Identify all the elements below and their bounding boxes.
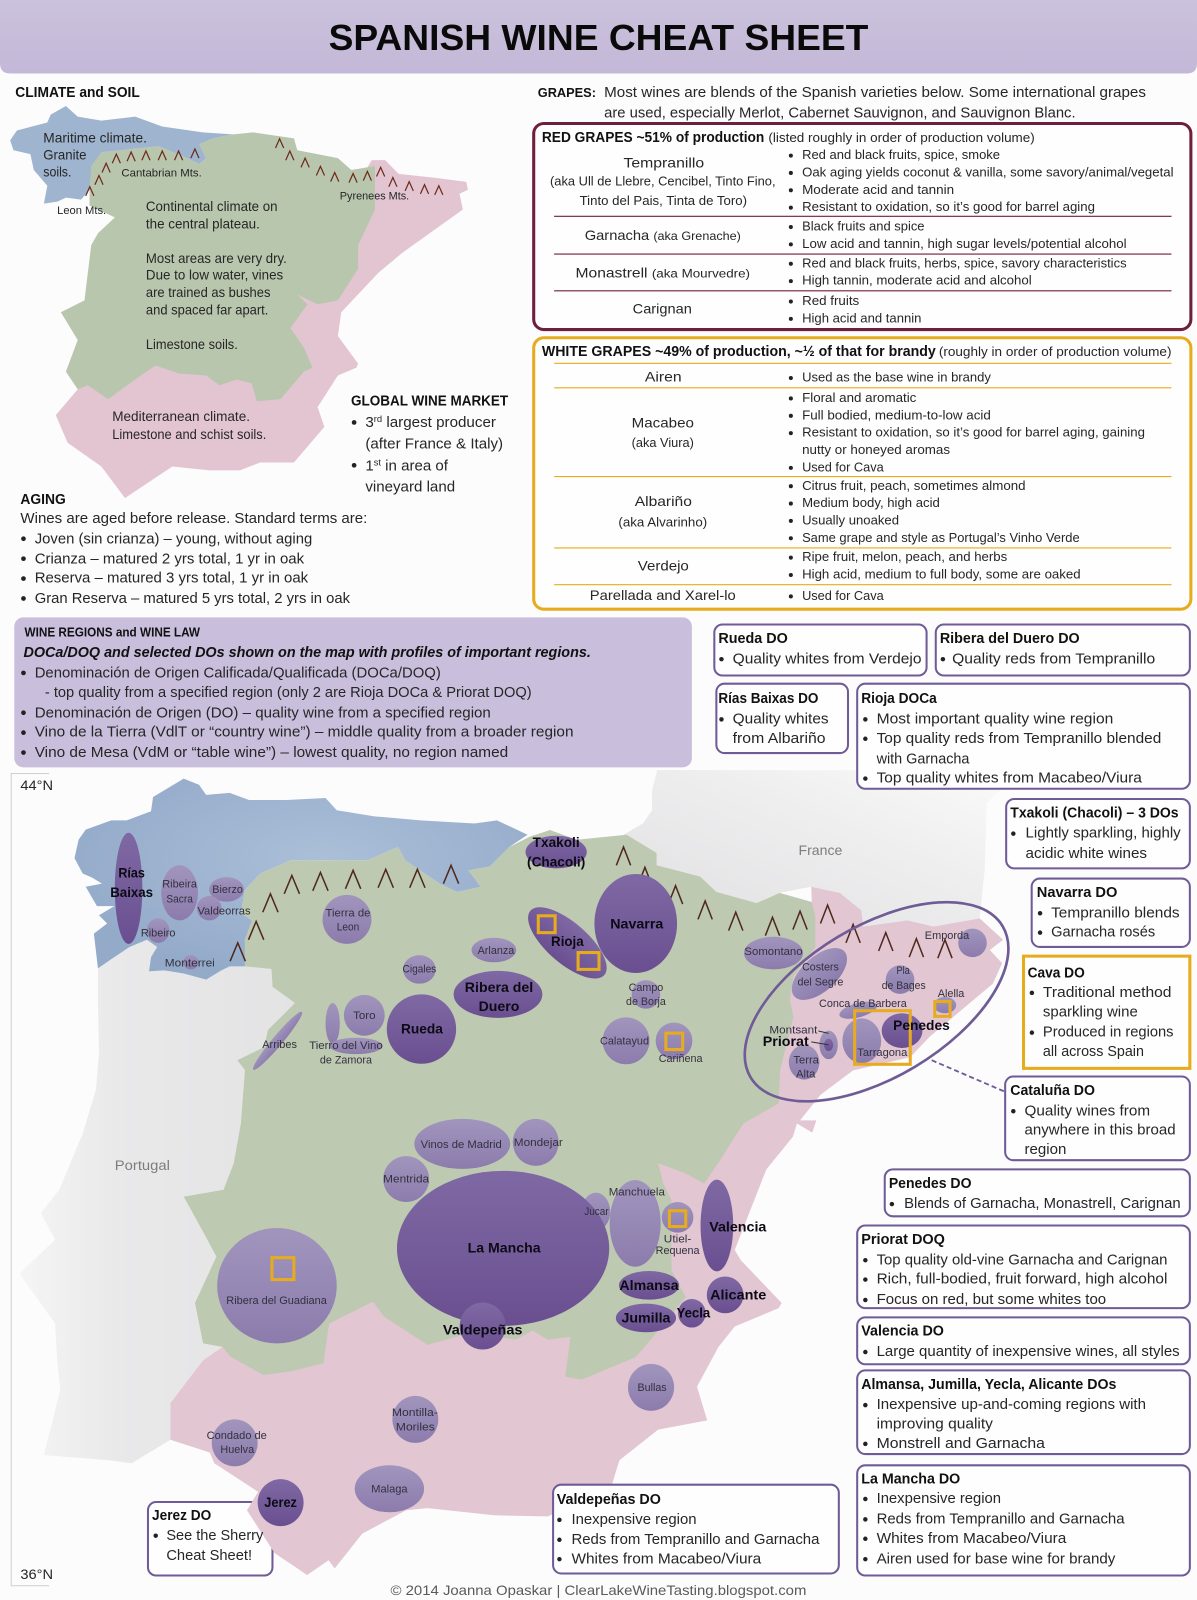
callout: Navarra DO: Tempranillo blends	[1051, 905, 1180, 921]
callout: Priorat DOQ: Focus on red, but some whites too	[877, 1292, 1106, 1308]
region labels: major: Valdepeñas	[443, 1322, 523, 1338]
callout text: Jerez DO	[152, 1508, 264, 1564]
latitude labels	[20, 778, 53, 1583]
climate text: maritime: Maritime climate.	[43, 130, 147, 146]
region labels: minor: Mondejar	[514, 1137, 563, 1149]
grapes intro text: Most wines are blends of the Spanish varieties below. Some international grapes	[604, 85, 1146, 101]
region labels: major: Jerez	[264, 1494, 297, 1510]
callout: Rías Baixas DO: Rías Baixas DO	[718, 691, 818, 707]
climate text: maritime	[43, 130, 147, 181]
grape: macabeo	[632, 391, 1145, 474]
callout: Txakoli: acidic white wines	[1026, 846, 1147, 862]
climate text: mediterranean: Mediterranean climate.	[112, 409, 250, 425]
grapes intro text	[538, 85, 1146, 121]
region labels: major: Txakoli	[533, 834, 580, 850]
callout: Valencia DO: Large quantity of inexpensive wines, all styles	[877, 1344, 1180, 1360]
panel: global wine market	[351, 394, 508, 495]
region labels: major: Valencia	[709, 1219, 767, 1235]
callout: Rueda DO: Quality whites from Verdejo	[733, 651, 921, 667]
callout text: Jerez DO: Cheat Sheet!	[166, 1548, 252, 1564]
region labels: minor: Tierro del Vino	[309, 1040, 383, 1052]
grape: tempranillo: Tinto del Pais, Tinta de Toro)	[580, 194, 747, 208]
grape: carignan: Red fruits	[802, 294, 859, 308]
grape: macabeo: Macabeo	[632, 416, 694, 432]
panel: white grapes: (roughly in order of production volume)	[939, 345, 1171, 359]
callout: Priorat DOQ: Priorat DOQ	[861, 1232, 945, 1248]
callout: Valdepeñas DO: Reds from Tempranillo and Garnacha	[571, 1532, 820, 1548]
callout: Rioja DOCa: Top quality whites from Macabeo/Viura	[877, 771, 1143, 787]
panel: wine regions and wine law: Vino de Mesa (VdM or “table wine”) – lowest quality, no region named	[35, 745, 508, 761]
panel: wine regions and wine law: Denominación de Origen Calificada/Qualificada (DOCa/DOQ)	[35, 666, 441, 682]
region labels: minor: Cariñena	[659, 1053, 703, 1065]
callout: Rioja DOCa	[857, 684, 1190, 789]
panel: aging	[20, 492, 367, 607]
Catalonia dashed leader	[932, 1060, 1005, 1092]
grape: verdejo: Ripe fruit, melon, peach, and herbs	[802, 550, 1007, 564]
region labels: minor: Bullas	[638, 1382, 667, 1394]
Catalonia outline	[712, 861, 1041, 1142]
grape: albarino	[618, 479, 1080, 545]
region labels: major: La Mancha	[468, 1240, 541, 1256]
grape: monastrell: Monastrell (aka Mourvedre)	[576, 266, 750, 282]
grape: airen: Used as the base wine in brandy	[802, 371, 992, 385]
grapes intro text: GRAPES:	[538, 85, 596, 100]
climate text: continental: Due to low water, vines	[146, 268, 283, 284]
region labels: major: Navarra	[610, 916, 664, 932]
region labels: major: Penedes	[893, 1017, 950, 1033]
callout: La Mancha DO: La Mancha DO	[861, 1472, 960, 1488]
climate text: continental: Continental climate on	[146, 199, 278, 215]
country labels	[115, 843, 842, 1174]
map frame corner lines	[11, 773, 49, 1586]
region labels: major: Ribera del	[465, 979, 533, 995]
region labels: minor: de Zamora	[320, 1054, 372, 1066]
grape: monastrell: Red and black fruits, herbs, spice, savory characteristics	[802, 256, 1127, 270]
footer credit: © 2014 Joanna Opaskar | ClearLakeWineTasting.blogspot.com	[391, 1583, 806, 1599]
callout: Rueda DO: Rueda DO	[718, 631, 788, 647]
heading: climate and soil: CLIMATE and SOIL	[15, 85, 140, 101]
climate text: maritime: Granite	[43, 148, 87, 164]
grape: monastrell: High tannin, moderate acid and alcohol	[802, 274, 1032, 288]
panel: aging: Joven (sin crianza) – young, without aging	[35, 532, 312, 548]
climate text: maritime: soils.	[43, 165, 71, 181]
callout: La Mancha DO: Airen used for base wine for brandy	[877, 1551, 1116, 1567]
callout: Navarra DO	[1032, 879, 1190, 947]
region labels: major: Baixas	[110, 884, 153, 900]
callout: Rías Baixas DO: Quality whites	[733, 711, 829, 727]
callout: Rueda DO	[714, 624, 927, 676]
callout: Navarra DO: Garnacha rosés	[1051, 925, 1155, 941]
grape: verdejo: Verdejo	[638, 558, 689, 574]
grape: albarino: (aka Alvarinho)	[618, 516, 707, 530]
panel: wine regions and wine law: Vino de la Tierra (VdlT or “country wine”) – middle quality from a broader region	[35, 725, 573, 741]
callout: Rías Baixas DO: from Albariño	[733, 731, 826, 747]
region labels: minor: Arlanza	[478, 945, 514, 957]
region labels: minor	[141, 879, 969, 1495]
callout: Cava DO: sparkling wine	[1043, 1004, 1138, 1020]
callout: Rías Baixas DO	[716, 684, 848, 753]
grape: albarino: Same grape and style as Portugal’s Vinho Verde	[802, 531, 1080, 545]
callout: Rioja DOCa: Most important quality wine region	[877, 711, 1113, 727]
region labels: minor: de Borja	[626, 996, 666, 1008]
region labels: major: Rías	[118, 865, 145, 881]
grape: tempranillo: (aka Ull de Llebre, Cencibel, Tinto Fino,	[550, 175, 776, 189]
panel: global wine market: 3	[365, 415, 374, 431]
grape: garnacha: Garnacha (aka Grenache)	[585, 228, 741, 244]
grapes intro text: are used, especially Merlot, Cabernet Sauvignon, and Sauvignon Blanc.	[604, 105, 1076, 121]
region labels: minor: Ribeiro	[141, 928, 176, 940]
panel: wine regions and wine law: WINE REGIONS and WINE LAW	[24, 625, 200, 640]
region labels: minor: Leon	[337, 922, 359, 934]
climate text: continental	[146, 199, 287, 353]
grape: parellada and xarel-lo	[590, 588, 884, 604]
title banner: SPANISH WINE CHEAT SHEET	[329, 18, 869, 58]
panel: global wine market: GLOBAL WINE MARKET	[351, 394, 508, 410]
region labels: minor: Costers	[802, 961, 839, 973]
callout: La Mancha DO: Whites from Macabeo/Viura	[877, 1531, 1067, 1547]
callout: Valdepeñas DO: Whites from Macabeo/Viura	[571, 1551, 762, 1567]
mountain labels	[57, 168, 409, 217]
callout: Priorat DOQ	[857, 1226, 1190, 1308]
region labels: minor: Malaga	[371, 1483, 408, 1495]
grape: macabeo: Full bodied, medium-to-low acid	[802, 408, 991, 422]
panel: global wine market: vineyard land	[365, 479, 455, 495]
region labels: minor: Tarragona	[857, 1047, 907, 1059]
country labels: France	[799, 843, 842, 859]
grape: albarino: Medium body, high acid	[802, 496, 940, 510]
panel: global wine market: st	[374, 457, 381, 467]
grape: carignan: Carignan	[633, 301, 692, 317]
grape: parellada and xarel-lo: Parellada and Xarel-lo	[590, 588, 736, 604]
grape: garnacha: Low acid and tannin, high sugar levels/potential alcohol	[802, 237, 1127, 251]
climate zone: Mediterranean	[170, 887, 1003, 1575]
grape: carignan: High acid and tannin	[802, 311, 922, 325]
title banner	[0, 0, 1197, 73]
callout: Cataluña DO: Quality wines from	[1025, 1103, 1150, 1119]
callout: Cataluña DO: Cataluña DO	[1010, 1083, 1095, 1099]
callout: Ribera del Duero DO: Quality reds from Tempranillo	[952, 651, 1155, 667]
grape: macabeo: Used for Cava	[802, 460, 884, 474]
callout: Penedes DO: Penedes DO	[889, 1176, 971, 1192]
mountain labels: Leon Mts.	[57, 205, 106, 217]
callout: Txakoli	[1006, 799, 1190, 868]
region labels: minor: Valdeorras	[197, 905, 251, 917]
callout: Priorat DOQ: Rich, full-bodied, fruit forward, high alcohol	[877, 1272, 1167, 1288]
callout: La Mancha DO: Inexpensive region	[877, 1491, 1001, 1507]
region labels: minor: Alella	[938, 988, 964, 1000]
grape: garnacha: Black fruits and spice	[802, 220, 925, 234]
panel: wine regions and wine law	[14, 617, 692, 767]
callout: Txakoli: Txakoli (Chacoli) – 3 DOs	[1010, 805, 1179, 821]
callout: Priorat DOQ: Top quality old-vine Garnacha and Carignan	[877, 1252, 1167, 1268]
panel: aging: Wines are aged before release. Standard terms are:	[20, 511, 367, 527]
callout: Ribera del Duero DO: Ribera del Duero DO	[940, 631, 1080, 647]
grape: macabeo: Floral and aromatic	[802, 391, 916, 405]
callout: Txakoli: Lightly sparkling, highly	[1026, 826, 1181, 842]
region labels: minor: Montsant	[769, 1024, 817, 1036]
region labels: major: Almansa	[619, 1277, 679, 1293]
callout: Valencia DO	[857, 1317, 1190, 1364]
callout: Almansa, Jumilla, Yecla, Alicante DOs: improving quality	[877, 1417, 994, 1433]
region labels: minor: Somontano	[744, 946, 803, 958]
panel: global wine market: 1	[365, 458, 374, 474]
grape: macabeo: (aka Viura)	[632, 436, 694, 450]
callout: Cava DO: all across Spain	[1043, 1044, 1144, 1060]
callout: Valdepeñas DO: Inexpensive region	[571, 1512, 697, 1528]
climate zone: Continental	[184, 830, 815, 1380]
callout: Almansa, Jumilla, Yecla, Alicante DOs	[857, 1370, 1190, 1454]
grape: monastrell	[576, 256, 1127, 288]
panel: global wine market: rd	[374, 414, 382, 424]
panel: wine regions and wine law: - top quality from a specified region (only 2 are Rioja DOCa & Priorat DOQ)	[45, 685, 532, 701]
grape: airen: Airen	[645, 370, 682, 386]
callout: Valdepeñas DO	[553, 1485, 839, 1573]
region labels: major: Rueda	[401, 1021, 443, 1037]
region labels: minor: Ribera del Guadiana	[226, 1295, 327, 1307]
grape: tempranillo: Resistant to oxidation, so it’s good for barrel aging	[802, 200, 1095, 214]
climate text: mediterranean	[112, 409, 266, 443]
region labels: minor: Arribes	[262, 1039, 298, 1051]
climate text: continental: and spaced far apart.	[146, 302, 268, 318]
panel: white grapes	[534, 338, 1191, 609]
Priorat and Montsant leaders	[811, 1031, 829, 1045]
callout: La Mancha DO	[857, 1465, 1190, 1576]
mountain markers: climate map	[86, 139, 443, 196]
climate text: continental: the central plateau.	[146, 217, 260, 233]
region labels: minor: Montilla-	[392, 1407, 438, 1419]
region labels: minor: Terra	[793, 1054, 819, 1066]
region labels: minor: Monterrei	[165, 957, 215, 969]
callout: Ribera del Duero DO	[936, 624, 1190, 676]
panel: global wine market: in area of	[381, 458, 449, 474]
mountain labels: Pyrenees Mts.	[340, 191, 409, 203]
panel: global wine market: largest producer	[382, 415, 496, 431]
region labels: minor: Calatayud	[600, 1035, 649, 1047]
panel: aging: Gran Reserva – matured 5 yrs total, 2 yrs in oak	[35, 591, 351, 607]
region labels: minor: Campo	[629, 982, 663, 994]
panel: wine regions and wine law: Denominación de Origen (DO) – quality wine from a specified region	[35, 705, 491, 721]
climate text: mediterranean: Limestone and schist soils.	[112, 427, 266, 443]
callout: Cataluña DO: anywhere in this broad	[1025, 1123, 1176, 1139]
region labels: major	[110, 834, 950, 1510]
mountain markers: wine map	[230, 847, 952, 961]
callout frame: Jerez DO	[148, 1502, 272, 1576]
callout: Valdepeñas DO: Valdepeñas DO	[557, 1492, 661, 1508]
region labels: minor: Vinos de Madrid	[421, 1139, 502, 1151]
callout: Rioja DOCa: Rioja DOCa	[861, 691, 938, 707]
region labels: major: Yecla	[677, 1304, 711, 1320]
region labels: minor: Cigales	[403, 963, 437, 975]
grape: carignan	[633, 294, 922, 325]
panel: red grapes: (listed roughly in order of production volume)	[768, 131, 1035, 145]
callout text: Jerez DO: Jerez DO	[152, 1508, 211, 1524]
region labels: major: (Chacoli)	[527, 853, 585, 869]
country: Portugal	[19, 940, 295, 1463]
region labels: minor: Utiel-	[664, 1234, 692, 1246]
region labels: major: Alicante	[710, 1286, 767, 1302]
region labels: minor: Alta	[796, 1069, 815, 1081]
regions: light purple	[147, 865, 987, 1512]
region labels: minor: Bierzo	[212, 884, 243, 896]
region labels: minor: del Segre	[797, 977, 843, 989]
mountain labels: Cantabrian Mts.	[121, 168, 202, 180]
region labels: minor: Jucar	[584, 1206, 609, 1218]
grape: tempranillo: Tempranillo	[624, 155, 704, 171]
latitude labels: 36°N	[20, 1567, 53, 1583]
callout: Cava DO	[1024, 956, 1190, 1068]
region labels: minor: Condado de	[207, 1430, 267, 1442]
callout: Cava DO: Produced in regions	[1043, 1025, 1174, 1041]
panel: red grapes	[534, 123, 1191, 330]
grape: tempranillo: Red and black fruits, spice, smoke	[802, 148, 1000, 162]
grape: garnacha	[585, 220, 1127, 251]
grape: macabeo: Resistant to oxidation, so it’s good for barrel aging, gaining	[802, 426, 1145, 440]
region labels: minor: Manchuela	[609, 1187, 665, 1199]
region labels: minor: Conca de Barbera	[819, 998, 907, 1010]
callout: Almansa, Jumilla, Yecla, Alicante DOs: Almansa, Jumilla, Yecla, Alicante DOs	[861, 1377, 1116, 1393]
climate text: continental: Limestone soils.	[146, 337, 238, 353]
region labels: major: Jumilla	[621, 1309, 671, 1325]
region labels: minor: Sacra	[166, 894, 193, 906]
callout: Rioja DOCa: Top quality reds from Tempranillo blended	[877, 731, 1161, 747]
region labels: major: Priorat	[763, 1033, 809, 1049]
panel: wine regions and wine law: DOCa/DOQ and selected DOs shown on the map with profiles of important regions.	[23, 645, 591, 661]
panel: white grapes: WHITE GRAPES ~49% of production, ~½ of that for brandy	[542, 344, 936, 360]
grape: airen	[645, 370, 992, 386]
region labels: minor: Tierra de	[326, 907, 370, 919]
grape: tempranillo: Oak aging yields coconut & vanilla, some savory/animal/vegetal	[802, 166, 1174, 180]
regions: dark purple	[115, 833, 922, 1526]
callout: Cataluña DO: region	[1025, 1142, 1066, 1158]
callout: Cataluña DO	[1005, 1077, 1190, 1160]
country labels: Portugal	[115, 1158, 170, 1174]
grape: albarino: Citrus fruit, peach, sometimes almond	[802, 479, 1026, 493]
region labels: minor: Moriles	[396, 1422, 435, 1434]
grape: albarino: Albariño	[635, 494, 692, 510]
callout: Penedes DO	[885, 1169, 1190, 1216]
callout: La Mancha DO: Reds from Tempranillo and Garnacha	[877, 1511, 1125, 1527]
callout: Navarra DO: Navarra DO	[1037, 885, 1117, 901]
callout: Valencia DO: Valencia DO	[861, 1324, 944, 1340]
Cava production markers	[272, 916, 950, 1280]
latitude labels: 44°N	[20, 778, 53, 794]
region labels: minor: Ribeira	[162, 879, 197, 891]
grape: tempranillo	[550, 148, 1174, 214]
callout: Rioja DOCa: with Garnacha	[876, 751, 970, 767]
region labels: minor: Mentrida	[383, 1174, 429, 1186]
grape: tempranillo: Moderate acid and tannin	[802, 183, 954, 197]
panel: global wine market: (after France & Italy)	[365, 437, 503, 453]
grape: macabeo: nutty or honeyed aromas	[802, 443, 950, 457]
wine regions map	[19, 770, 1041, 1583]
callout: Almansa, Jumilla, Yecla, Alicante DOs: Monstrell and Garnacha	[877, 1436, 1046, 1452]
climate zone: Maritime	[74, 779, 528, 980]
callout: Penedes DO: Blends of Garnacha, Monastrell, Carignan	[904, 1196, 1181, 1212]
callout: Cava DO: Cava DO	[1028, 966, 1085, 982]
grape: verdejo	[638, 550, 1081, 582]
panel: climate and soil	[10, 85, 468, 498]
callout: Almansa, Jumilla, Yecla, Alicante DOs: Inexpensive up-and-coming regions with	[877, 1397, 1146, 1413]
callout: Cava DO: Traditional method	[1043, 985, 1171, 1001]
callout text: Jerez DO: See the Sherry	[166, 1528, 264, 1544]
panel: aging: Crianza – matured 2 yrs total, 1 yr in oak	[35, 551, 305, 567]
region labels: minor: de Bages	[882, 980, 926, 992]
country: France	[624, 770, 1000, 927]
climate text: continental: are trained as bushes	[146, 285, 270, 301]
region labels: minor: Pla	[896, 965, 910, 977]
grape: verdejo: High acid, medium to full body, some are oaked	[802, 568, 1081, 582]
panel: aging: AGING	[20, 492, 66, 508]
climate text: continental: Most areas are very dry.	[146, 251, 287, 267]
region labels: major: Duero	[479, 998, 519, 1014]
region labels: minor: Toro	[353, 1010, 376, 1022]
region labels: minor: Emporda	[925, 930, 969, 942]
climate map of Spain	[10, 106, 468, 498]
region labels: minor: Requena	[656, 1245, 700, 1257]
grape: albarino: Usually unoaked	[802, 513, 899, 527]
panel: red grapes: RED GRAPES ~51% of production	[542, 130, 764, 146]
region labels: minor: Huelva	[220, 1444, 254, 1456]
panel: aging: Reserva – matured 3 yrs total, 1 yr in oak	[35, 571, 309, 587]
grape: parellada and xarel-lo: Used for Cava	[802, 589, 884, 603]
region labels: major: Rioja	[551, 933, 584, 949]
